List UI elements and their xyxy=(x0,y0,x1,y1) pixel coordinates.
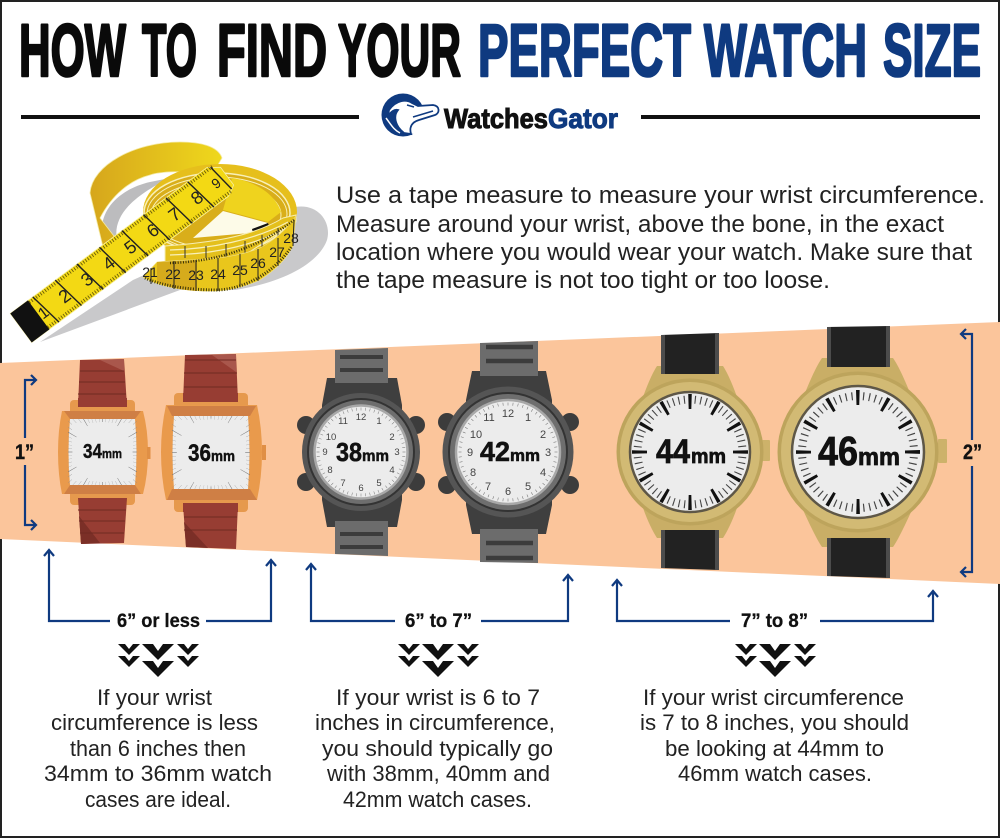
logo: WatchesGator xyxy=(382,94,618,136)
description: than 6 inches then xyxy=(70,736,246,761)
range label: 6” to 7” xyxy=(405,611,472,632)
peach band xyxy=(0,322,1000,584)
ticks major xyxy=(804,398,912,506)
chevrons xyxy=(118,644,199,677)
description: If your wrist is 6 to 7 xyxy=(336,685,540,710)
label: 34 xyxy=(83,441,103,463)
dial xyxy=(456,400,560,504)
label: 1” xyxy=(15,441,34,464)
label: 2” xyxy=(963,441,982,464)
label: mm xyxy=(211,448,235,465)
intro text block: Use a tape measure to measure your wrist circumference. xyxy=(336,182,985,209)
tape wraps ticks xyxy=(185,228,278,258)
range column: 6 to 7 xyxy=(306,564,573,812)
intro text block: Measure around your wrist, above the bone, in the exact xyxy=(336,211,944,238)
strip numbers: 2 xyxy=(55,285,75,307)
numerals: 4 xyxy=(389,465,395,476)
numerals: 5 xyxy=(376,478,382,489)
case xyxy=(616,378,764,526)
title xyxy=(19,9,981,92)
description: be looking at 44mm to xyxy=(665,736,884,761)
logo wordmark xyxy=(444,103,618,134)
band highlight xyxy=(212,354,236,372)
tape coil ticks xyxy=(151,220,294,291)
tape coil upper scale xyxy=(170,220,294,263)
strip black tip xyxy=(10,300,49,342)
label: 38 xyxy=(336,437,362,467)
case xyxy=(161,405,262,500)
label: 46 xyxy=(818,428,858,474)
label: mm xyxy=(510,446,540,465)
tape wraps lines xyxy=(170,222,292,255)
range column: 7 to 8 xyxy=(612,580,938,786)
numerals: 2 xyxy=(540,429,546,441)
tape coil lower scale xyxy=(145,246,292,290)
logo wordmark: Watches xyxy=(444,103,548,134)
numerals: 4 xyxy=(540,467,546,479)
lugs xyxy=(70,400,135,505)
dial xyxy=(172,416,250,489)
band xyxy=(335,348,388,383)
tape coil numbers: 27 xyxy=(269,244,285,260)
watch: 42mm xyxy=(438,341,579,563)
label: mm xyxy=(362,448,389,465)
buttons xyxy=(297,416,315,434)
tape coil numbers: 25 xyxy=(232,262,248,278)
range label: 7” to 8” xyxy=(741,611,808,632)
title: HOW xyxy=(19,9,126,92)
intro text block xyxy=(336,182,985,294)
label: mm xyxy=(858,444,900,471)
band lower xyxy=(78,498,127,544)
numerals: 8 xyxy=(327,465,333,476)
lugs xyxy=(803,358,912,547)
ticks major xyxy=(640,402,740,502)
numerals: 12 xyxy=(356,412,366,423)
description: 42mm watch cases. xyxy=(343,787,532,812)
ticks xyxy=(460,404,556,500)
strip numbers: 4 xyxy=(99,252,119,274)
description: with 38mm, 40mm and xyxy=(326,761,550,786)
measure: 1 inch xyxy=(15,375,36,530)
crown xyxy=(938,439,947,463)
tape wraps xyxy=(165,215,296,264)
dial xyxy=(792,386,924,518)
title: WATCH xyxy=(704,9,867,92)
numerals: 9 xyxy=(322,447,328,458)
label: 44 xyxy=(656,433,690,471)
bezel xyxy=(64,411,141,419)
tape coil hole xyxy=(223,178,281,222)
watch: 38mm xyxy=(297,348,425,556)
bezel xyxy=(167,406,256,416)
numerals: 10 xyxy=(326,432,336,443)
numerals: 8 xyxy=(470,467,476,479)
crown xyxy=(262,445,266,460)
tape hole white xyxy=(193,211,268,238)
band redraw bottom edge xyxy=(183,503,238,512)
description: 46mm watch cases. xyxy=(678,761,872,786)
tape coil front band xyxy=(143,216,296,291)
band highlight xyxy=(100,359,124,371)
band lower xyxy=(661,530,719,570)
dial xyxy=(630,392,750,512)
tape coil numbers: 22 xyxy=(165,266,181,282)
strip numbers: 1 xyxy=(35,304,53,323)
bracket arrows xyxy=(44,550,276,621)
crown xyxy=(762,440,770,461)
dial xyxy=(68,419,136,485)
tape back loop xyxy=(90,142,222,247)
tape shadow xyxy=(40,206,328,342)
label xyxy=(480,436,540,467)
band xyxy=(183,354,238,401)
tape coil numbers: 26 xyxy=(250,255,266,271)
ticks minor xyxy=(802,396,914,508)
ticks minor xyxy=(638,400,742,504)
band xyxy=(78,359,127,406)
description: cases are ideal. xyxy=(85,787,231,812)
lugs xyxy=(642,366,738,538)
range column: 6 or less xyxy=(44,550,276,812)
description: If your wrist xyxy=(97,685,213,710)
numerals: 7 xyxy=(485,481,491,493)
lugs xyxy=(322,378,402,527)
numerals: 2 xyxy=(389,432,395,443)
bezel xyxy=(449,393,567,511)
label xyxy=(818,428,900,474)
ticks xyxy=(172,416,250,489)
numerals: 1 xyxy=(376,416,382,427)
band xyxy=(480,341,538,376)
description: 34mm to 36mm watch xyxy=(44,761,272,786)
description xyxy=(640,685,909,786)
label: 36 xyxy=(188,440,211,467)
strip numbers: 7 xyxy=(165,204,185,226)
icon: gator xyxy=(382,94,439,136)
band lower shade xyxy=(184,522,208,548)
watch: 36mm xyxy=(161,354,266,549)
bracket arrows xyxy=(306,564,573,621)
numerals: 11 xyxy=(483,412,495,424)
chevrons xyxy=(398,644,479,677)
dial xyxy=(314,406,408,498)
intro text block: location where you would wear your watch. Make sure that xyxy=(336,239,972,266)
bracket arrows xyxy=(612,580,938,621)
title: YOUR xyxy=(338,9,461,92)
label xyxy=(83,441,122,463)
arrow xyxy=(961,329,972,577)
ticks xyxy=(318,409,404,495)
watch: 44mm xyxy=(616,333,770,570)
band redraw top edge xyxy=(183,393,238,402)
numerals: 1 xyxy=(525,412,531,424)
strip numbers: 6 xyxy=(143,220,163,242)
title: PERFECT xyxy=(478,9,691,92)
tape coil numbers: 24 xyxy=(210,266,226,282)
numerals: 11 xyxy=(338,416,348,427)
strip numbers: 9 xyxy=(208,174,224,192)
divider left xyxy=(21,115,359,119)
tape coil inner wraps xyxy=(144,173,290,253)
case xyxy=(302,393,420,511)
watch: 34mm xyxy=(58,359,150,544)
description: circumference is less xyxy=(51,710,258,735)
band xyxy=(661,333,719,374)
tape coil shaded segment xyxy=(157,260,197,291)
numerals: 12 xyxy=(502,408,514,420)
numerals xyxy=(467,408,551,498)
strip numbers: 3 xyxy=(77,268,97,291)
chevrons xyxy=(735,644,816,677)
lugs xyxy=(466,371,552,534)
tape coil numbers xyxy=(142,230,299,283)
range label: 6” or less xyxy=(117,611,200,632)
case xyxy=(778,372,938,532)
numerals: 10 xyxy=(470,429,482,441)
intro text block: the tape measure is not too tight or too loose. xyxy=(336,267,830,294)
tape coil numbers: 21 xyxy=(142,264,158,280)
buttons xyxy=(438,413,456,431)
numerals xyxy=(322,412,400,494)
tape straight strip xyxy=(10,161,237,342)
label xyxy=(656,433,726,471)
description xyxy=(44,685,272,812)
band xyxy=(827,326,890,367)
numerals: 9 xyxy=(467,447,473,459)
title: FIND xyxy=(217,9,327,92)
label: mm xyxy=(102,446,122,461)
description: you should typically go xyxy=(322,736,553,761)
watch: 46mm xyxy=(778,326,947,578)
logo wordmark: Gator xyxy=(548,103,618,134)
case xyxy=(58,411,148,494)
numerals: 7 xyxy=(340,478,346,489)
tape coil outer xyxy=(143,164,297,260)
strip numbers: 8 xyxy=(187,187,207,209)
numerals: 3 xyxy=(545,447,551,459)
description: inches in circumference, xyxy=(315,710,555,735)
lugs xyxy=(174,393,248,512)
case xyxy=(442,386,574,518)
tape shadow inner xyxy=(102,178,170,240)
description: If your wrist circumference xyxy=(643,685,904,710)
band lower xyxy=(827,538,890,578)
numerals: 3 xyxy=(394,447,400,458)
tape black end xyxy=(252,223,269,233)
icon: tape measure xyxy=(10,142,328,342)
band lower shade xyxy=(79,516,100,544)
strip numbers xyxy=(33,173,226,323)
numerals: 5 xyxy=(525,481,531,493)
tape coil numbers: 23 xyxy=(188,267,204,283)
arrow xyxy=(25,375,36,530)
title: TO xyxy=(142,9,197,92)
label: mm xyxy=(691,446,726,468)
ticks xyxy=(68,419,137,485)
divider right xyxy=(641,115,980,119)
strip major ticks xyxy=(33,163,234,326)
strip body xyxy=(10,161,237,342)
numerals: 6 xyxy=(505,486,511,498)
label: 42 xyxy=(480,436,510,467)
label xyxy=(188,440,235,467)
numerals: 6 xyxy=(358,483,364,494)
label xyxy=(336,437,389,467)
measure: 2 inch xyxy=(961,329,982,577)
tape coil numbers: 28 xyxy=(283,230,299,246)
band redraw top edge xyxy=(78,398,127,407)
description xyxy=(315,685,555,812)
description: is 7 to 8 inches, you should xyxy=(640,710,909,735)
band lower xyxy=(183,504,238,549)
crown xyxy=(147,447,150,459)
strip numbers: 5 xyxy=(120,236,140,258)
bezel xyxy=(308,399,414,505)
strip minor ticks xyxy=(29,167,231,327)
